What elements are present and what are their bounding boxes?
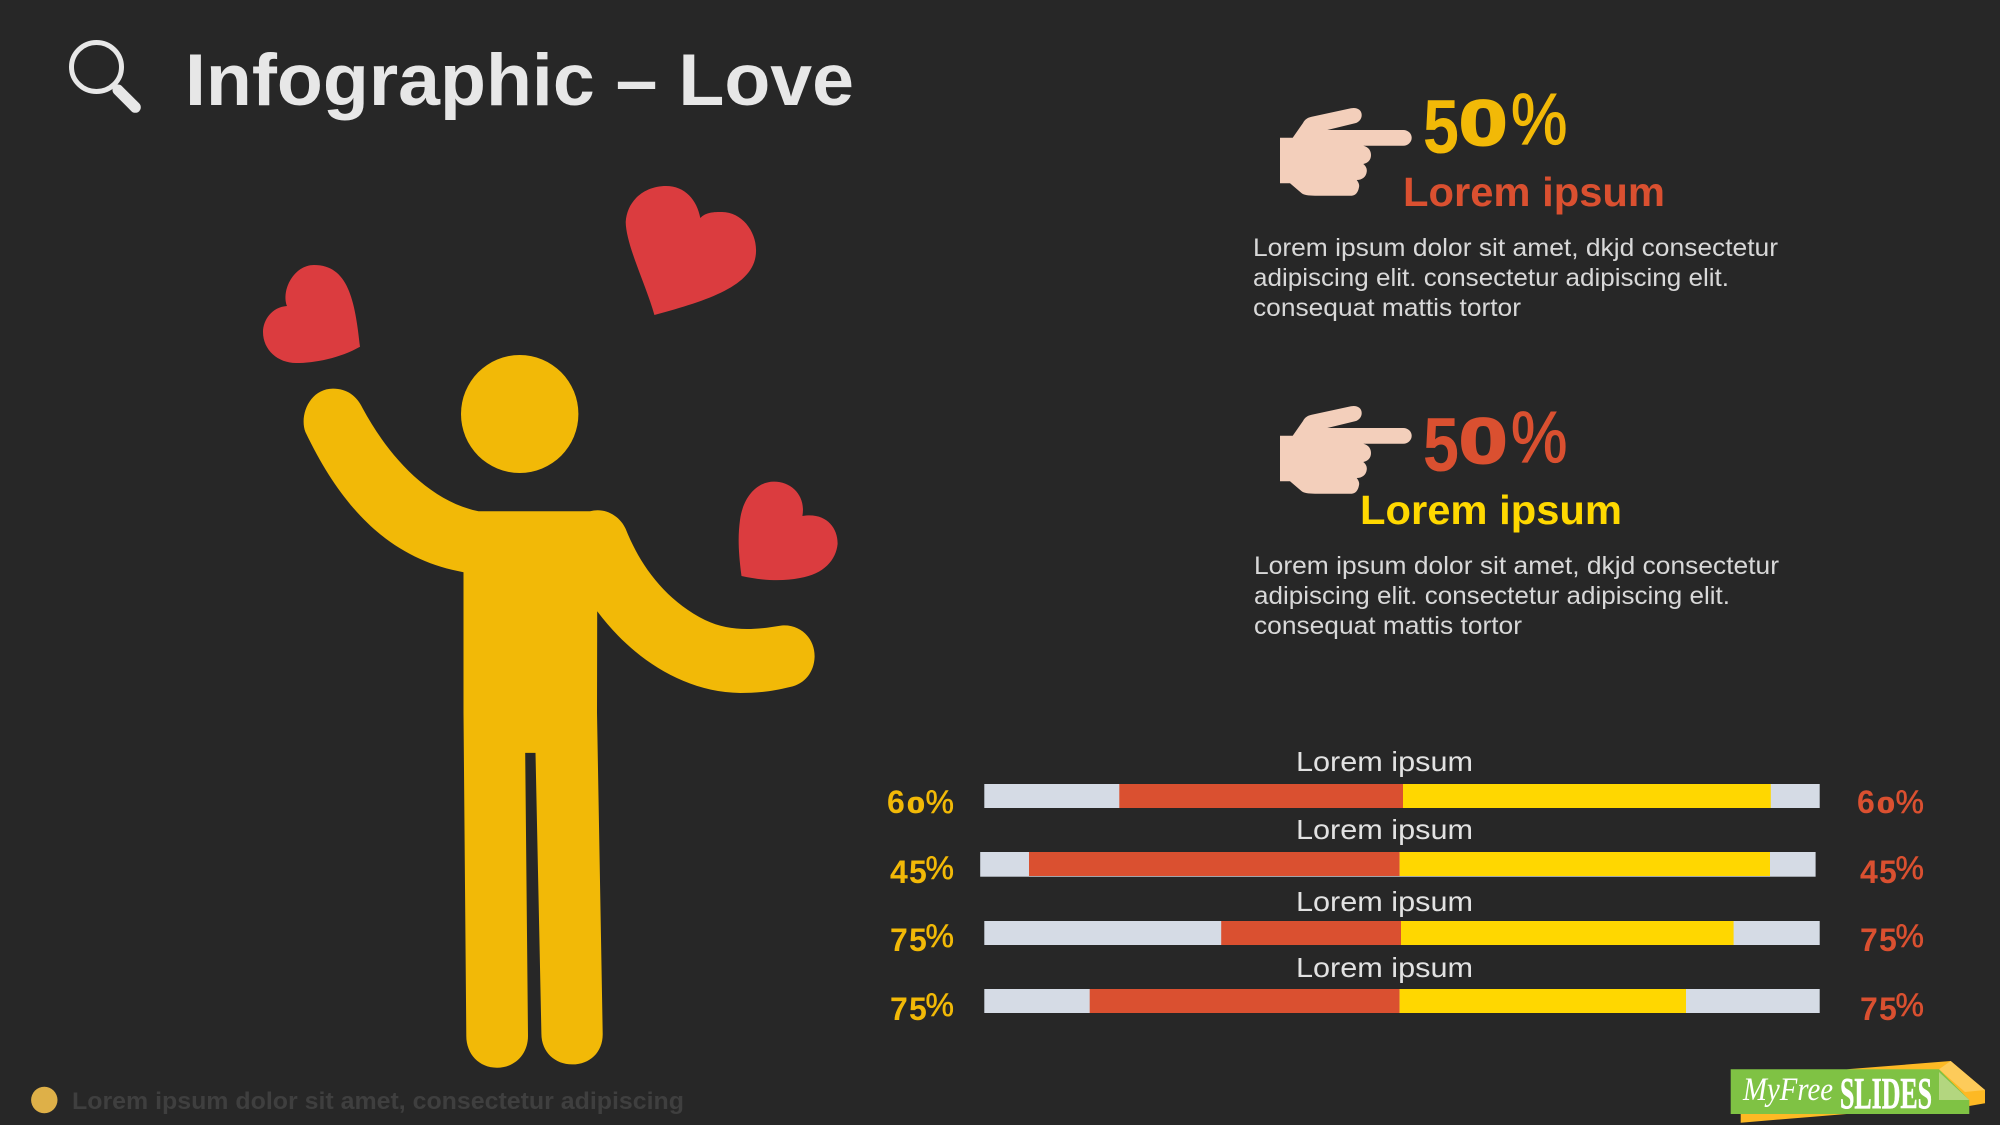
bar row 4: 7 [890,991,908,1027]
bar row 4: 5 [1879,991,1897,1027]
bar row 3 [890,886,1924,958]
bar row 2: 5 [909,854,927,890]
body text: adipiscing elit. consectetur adipiscing elit. [1254,582,1730,610]
icon: heart left [263,265,360,363]
bar row 1: Lorem ipsum [1296,746,1473,777]
body text: Lorem ipsum dolor sit amet, dkjd consectetur [1254,552,1779,580]
icon: heart right [739,482,838,580]
bar row 4: % [1896,987,1924,1023]
stat value: 0 [1459,405,1507,477]
icon: heart top [626,186,756,315]
bar row 1: 0 [906,792,924,817]
stat value: 0 [1459,87,1507,159]
panel: first stat [1253,85,1778,322]
bar row 3: 7 [890,922,908,958]
body text [1254,552,1779,640]
icon: magnifier [72,42,135,107]
icon: person head [461,355,578,473]
body text [1253,234,1778,322]
bar row 2: Lorem ipsum [1296,814,1473,845]
bar row 3: 5 [1879,922,1897,958]
logo: MyFreeSlides: MyFree [1742,1072,1833,1108]
icon: pointing hand [1280,108,1412,196]
bar row 2: 4 [1860,854,1878,890]
illustration: person juggling hearts [263,186,838,1068]
panel: second stat [1254,403,1779,640]
bar row 3: 5 [909,922,927,958]
body text: consequat mattis tortor [1254,612,1522,640]
icon: person body [304,389,815,1068]
bar row 3: 7 [1860,922,1878,958]
logo: MyFreeSlides [1731,1061,1985,1123]
subheading: Lorem ipsum [1403,169,1665,215]
bar row 4: Lorem ipsum [1296,952,1473,983]
icon: footer dot [31,1087,58,1113]
bar row 2: % [1896,850,1924,886]
stat value [1420,403,1572,479]
bar row 3: % [926,918,954,954]
icon: pointing hand [1280,406,1412,494]
logo: MyFreeSlides: SLIDES [1840,1069,1932,1118]
bar row 4: 7 [1860,991,1878,1027]
bar row 1 [885,746,1925,817]
title: Infographic – Love [185,40,854,121]
footer text: Lorem ipsum dolor sit amet, consectetur adipiscing [72,1088,684,1115]
bar chart [885,746,1925,1027]
bar row 2 [890,814,1924,890]
bar row 3: Lorem ipsum [1296,886,1473,917]
bar row 4: 5 [909,991,927,1027]
bar row 1: 0 [1876,792,1894,817]
subheading: Lorem ipsum [1360,487,1622,533]
body text: Lorem ipsum dolor sit amet, dkjd consectetur [1253,234,1778,262]
bar row 4: % [926,987,954,1023]
bar row 2: 4 [890,854,908,890]
bar row 4 [890,952,1924,1027]
body text: adipiscing elit. consectetur adipiscing elit. [1253,264,1729,292]
bar row 2: 5 [1879,854,1897,890]
bar row 3: % [1896,918,1924,954]
body text: consequat mattis tortor [1253,294,1521,322]
footer note [31,1087,684,1115]
bar row 2: % [926,850,954,886]
stat value [1420,85,1572,161]
